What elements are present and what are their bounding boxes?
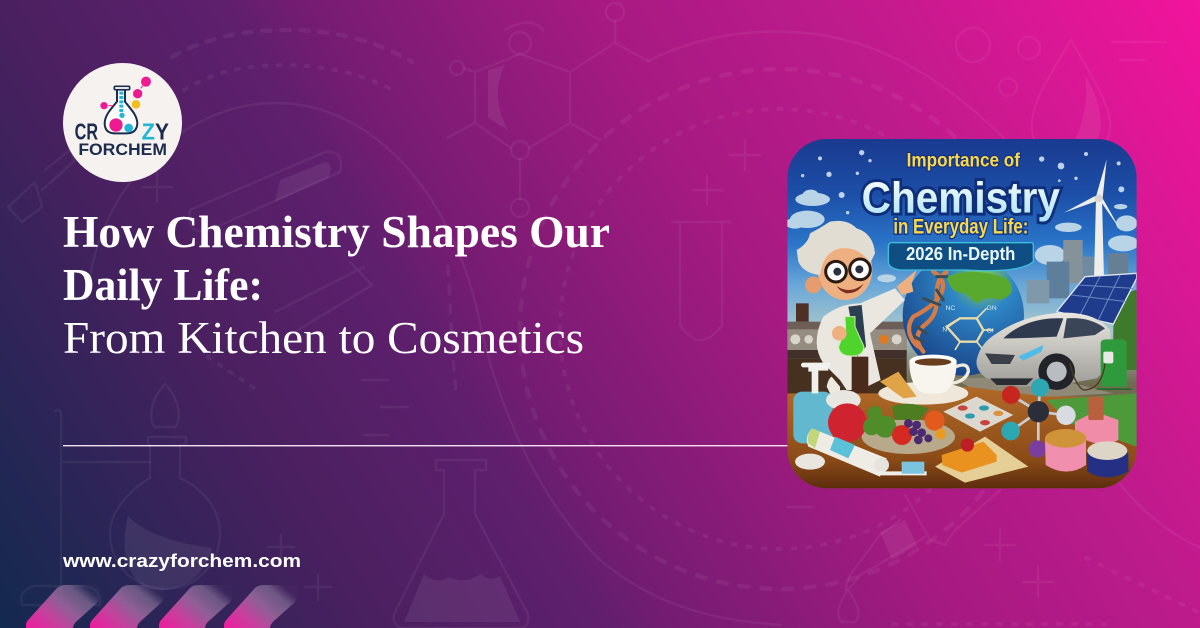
wind turbine (1064, 159, 1121, 280)
charging station (1070, 339, 1132, 390)
title line 1: How Chemistry Shapes Our (63, 207, 610, 257)
illustration text: in everyday life: in Everyday Life: (893, 214, 1028, 238)
icon: flask (105, 86, 137, 133)
pill blister pack (943, 397, 1013, 432)
green bushes (1113, 290, 1137, 370)
illustration text banner (888, 242, 1033, 271)
butter on napkin (935, 437, 1028, 483)
solar panel (1057, 273, 1137, 324)
coffee cup (878, 355, 968, 405)
globe (902, 270, 1024, 376)
city skyline (1027, 240, 1128, 303)
fruit plate (828, 403, 955, 454)
icon: molecule bubbles (100, 77, 151, 109)
illustration text: importance of: Importance of (907, 151, 1020, 172)
scientist (797, 221, 917, 393)
featured illustration (786, 139, 1139, 488)
logo badge (63, 63, 182, 182)
hand soap bottles (793, 365, 861, 443)
ball and stick molecule (1001, 379, 1076, 458)
background pattern: filled flask liquids (125, 65, 1101, 622)
chevron stripes (26, 585, 297, 628)
globe: GN (987, 305, 997, 312)
logo text: crazy for chem (75, 119, 169, 159)
cosmetics (1045, 397, 1128, 477)
clouds (786, 190, 1139, 282)
website url: www.crazyforchem.com (62, 551, 301, 571)
green flask (839, 317, 864, 356)
scientist head (818, 248, 872, 300)
illustration sky (787, 139, 1137, 488)
globe: N (942, 326, 947, 333)
stars (801, 150, 1124, 214)
logo text: crazy for chem: FORCHEM (78, 141, 167, 159)
dna helix (909, 272, 947, 352)
subtitle: From Kitchen to Cosmetics (63, 313, 584, 363)
globe: NC (946, 305, 955, 312)
scientist hair (797, 221, 875, 275)
scientist glasses (826, 259, 870, 282)
scientist coat (817, 288, 905, 390)
logo text: crazy for chem: CR (75, 119, 98, 145)
logo text: crazy for chem: Y (155, 119, 169, 145)
title (63, 207, 610, 363)
illustration text: 2026 in-depth: 2026 In-Depth (906, 243, 1015, 264)
electric car (976, 313, 1113, 390)
logo text: crazy for chem: Z (142, 119, 155, 145)
divider line (63, 445, 789, 446)
illustration text: chemistry: Chemistry (862, 174, 1060, 223)
road behind table (954, 378, 1113, 397)
illustration text: title badge (862, 151, 1060, 271)
toothpaste tube and brush (795, 428, 927, 477)
stove (787, 303, 907, 399)
globe: GI (987, 327, 994, 334)
table (787, 387, 1137, 488)
title line 2: Daily Life: (63, 260, 263, 310)
